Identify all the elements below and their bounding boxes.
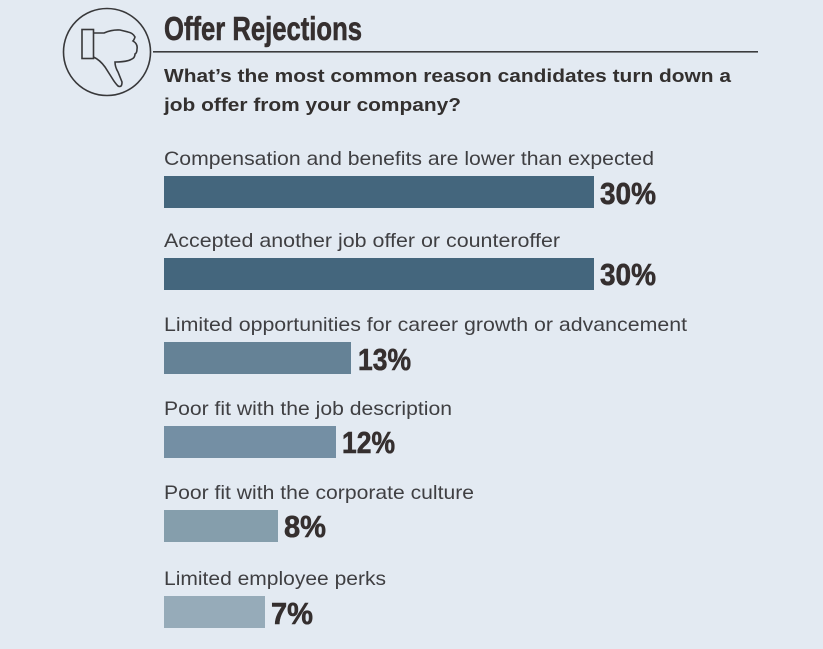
row: corporate culture 8%: Poor fit with the corporate culture — [164, 482, 474, 504]
row: employee perks 7% — [164, 568, 386, 631]
row: job description 12%: Poor fit with the job description — [164, 398, 452, 420]
row: compensation 30% — [164, 148, 656, 211]
row: employee perks 7%: 7% — [271, 596, 313, 631]
row: compensation 30%: 30% — [600, 176, 656, 211]
row: another offer 30% — [164, 230, 656, 292]
row: compensation 30%: Compensation and benefits are lower than expected — [164, 148, 654, 170]
row: another offer 30%: 30% — [600, 257, 656, 292]
row: job description 12%: 12% — [342, 425, 395, 460]
question: What’s the most common reason candidates turn down a — [164, 65, 732, 86]
row: corporate culture 8% — [164, 482, 474, 544]
title: Offer Rejections — [164, 10, 362, 47]
row: career growth 13% — [164, 314, 688, 377]
row: career growth 13%: 13% — [358, 342, 411, 377]
row: corporate culture 8%: 8% — [284, 509, 326, 544]
question: job offer from your company? — [163, 94, 461, 115]
row: another offer 30%: Accepted another job offer or counteroffer — [164, 230, 561, 252]
row: career growth 13%: Limited opportunities for career growth or advancement — [164, 314, 688, 336]
row: job description 12% — [164, 398, 452, 460]
row: employee perks 7%: Limited employee perks — [164, 568, 386, 590]
question — [163, 65, 732, 115]
icon: thumbs down — [64, 8, 150, 96]
